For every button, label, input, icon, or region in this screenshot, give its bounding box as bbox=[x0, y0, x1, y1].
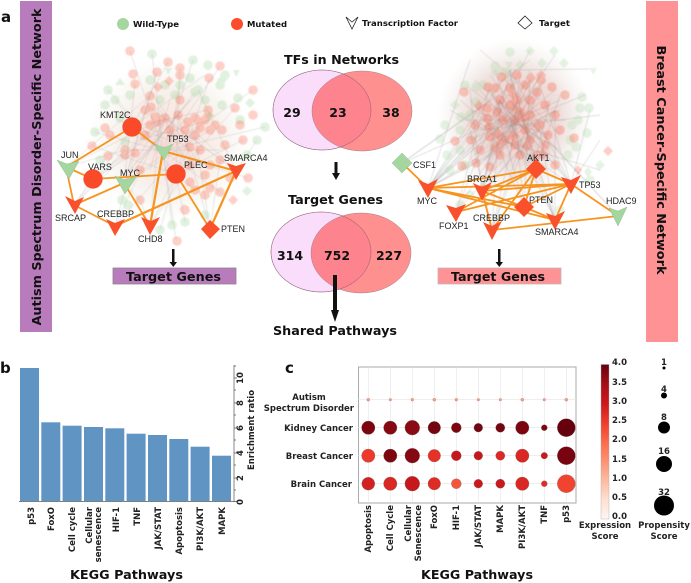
left network nodes bbox=[57, 118, 246, 239]
dot plot: Cell Cycle bbox=[386, 505, 396, 551]
right network labels: FOXP1 bbox=[439, 221, 469, 231]
left network labels: SRCAP bbox=[55, 213, 86, 223]
left network labels: VARS bbox=[88, 162, 112, 172]
right network edges bbox=[402, 163, 618, 230]
left side banner: Autism Spectrum Disorder-Specific Network bbox=[30, 7, 44, 326]
size legend: 32 bbox=[658, 488, 670, 498]
dot plot: Apoptosis bbox=[364, 505, 374, 553]
left network labels: CREBBP bbox=[97, 209, 134, 219]
x axis title b: KEGG Pathways bbox=[70, 567, 183, 582]
color bar legend: 0.5 bbox=[612, 493, 627, 503]
right network labels: MYC bbox=[417, 196, 438, 206]
left network labels: PLEC bbox=[184, 160, 208, 170]
right network background bbox=[402, 38, 618, 230]
arrow right network to target genes bbox=[496, 249, 503, 267]
bar chart: Enrichment ratio bbox=[247, 390, 257, 470]
legend: Mutated bbox=[247, 20, 287, 29]
target genes box left bbox=[113, 268, 236, 284]
heading TFs in Networks: TFs in Networks bbox=[284, 53, 399, 67]
panel label c: c bbox=[285, 359, 294, 377]
right side banner bbox=[646, 1, 678, 342]
bar chart: 0 bbox=[236, 499, 246, 505]
legend bbox=[117, 16, 570, 30]
dot plot: PI3K/AKT bbox=[518, 505, 528, 549]
arrow down to target genes bbox=[332, 162, 340, 180]
right network labels bbox=[413, 153, 637, 237]
color bar legend: 2.0 bbox=[612, 435, 627, 445]
bar chart: senescence bbox=[94, 507, 104, 562]
dot plot: Autism bbox=[292, 393, 326, 403]
color bar legend: 4.0 bbox=[612, 358, 627, 368]
color bar legend: 3.0 bbox=[612, 397, 627, 407]
left network edges bbox=[66, 127, 236, 229]
venn target genes bbox=[271, 212, 411, 293]
target genes box right: Target Genes bbox=[451, 270, 545, 284]
x axis title c: KEGG Pathways bbox=[421, 567, 533, 582]
right network labels: HDAC9 bbox=[606, 196, 637, 206]
arrow left network to target genes bbox=[170, 249, 177, 267]
right network labels: CREBBP bbox=[473, 213, 510, 223]
bar chart: 6 bbox=[236, 425, 246, 431]
bar chart: 2 bbox=[236, 475, 246, 481]
right network labels: BRCA1 bbox=[467, 174, 497, 184]
left network labels: JUN bbox=[61, 150, 78, 160]
heading Target Genes: Target Genes bbox=[288, 193, 383, 207]
left side banner bbox=[20, 1, 52, 332]
left network labels: PTEN bbox=[221, 224, 245, 234]
dot plot bbox=[264, 367, 576, 561]
bar chart: p53 bbox=[27, 507, 37, 525]
left network labels: MYC bbox=[120, 168, 140, 178]
bar chart: PI3K/AKT bbox=[196, 507, 206, 551]
bar chart: 10 bbox=[236, 372, 246, 384]
color bar legend: Score bbox=[592, 532, 619, 542]
size legend: 8 bbox=[661, 413, 667, 423]
dot plot: Senescence bbox=[414, 505, 424, 561]
dot plot: FoxO bbox=[430, 505, 440, 529]
right side banner: Breast Cancer-Specific Network bbox=[654, 46, 668, 276]
panel label a: a bbox=[1, 8, 11, 26]
left network labels: CHD8 bbox=[138, 234, 163, 244]
color bar legend: 1.0 bbox=[612, 474, 627, 484]
bar chart: 8 bbox=[236, 400, 246, 406]
venn TFs: 23 bbox=[329, 105, 347, 120]
dot plot: Spectrum Disorder bbox=[264, 404, 355, 414]
panel label b: b bbox=[0, 359, 11, 377]
arrow to shared pathways bbox=[331, 275, 339, 322]
legend: Target bbox=[539, 19, 570, 28]
left network labels: SMARCA4 bbox=[224, 153, 268, 163]
venn TFs: 38 bbox=[382, 105, 400, 120]
heading Shared Pathways: Shared Pathways bbox=[273, 324, 397, 338]
color bar legend: 3.5 bbox=[612, 378, 627, 388]
color bar legend bbox=[579, 358, 631, 542]
left network labels: TP53 bbox=[167, 134, 189, 144]
color bar legend: 2.5 bbox=[612, 416, 627, 426]
size legend: 16 bbox=[658, 447, 670, 457]
venn TFs bbox=[273, 70, 412, 151]
venn target genes: 314 bbox=[277, 248, 303, 263]
dot plot: MAPK bbox=[496, 505, 506, 533]
right network labels: CSF1 bbox=[413, 160, 436, 170]
target genes box right bbox=[438, 268, 561, 284]
dot plot: p53 bbox=[562, 505, 572, 523]
bar chart: Apoptosis bbox=[175, 507, 185, 555]
dot plot: Kidney Cancer bbox=[284, 424, 354, 434]
dot plot: Breast Cancer bbox=[286, 452, 354, 462]
size legend: 1 bbox=[661, 358, 667, 368]
bar chart bbox=[19, 365, 257, 562]
venn TFs: 29 bbox=[283, 105, 301, 120]
size legend: 4 bbox=[661, 385, 667, 395]
bar chart: Cell cycle bbox=[68, 507, 78, 552]
legend: Wild-Type bbox=[133, 20, 179, 29]
venn target genes: 227 bbox=[376, 248, 402, 263]
bar chart: TNF bbox=[133, 507, 143, 526]
dot plot: HIF-1 bbox=[452, 505, 462, 530]
bar chart: HIF-1 bbox=[112, 507, 122, 532]
right network nodes bbox=[392, 153, 627, 240]
venn target genes: 752 bbox=[324, 248, 350, 263]
dot plot: JAK/STAT bbox=[474, 505, 484, 548]
color bar legend: Expression bbox=[579, 521, 631, 531]
bar chart: 4 bbox=[236, 450, 246, 456]
dot plot: Cellular bbox=[404, 504, 414, 542]
size legend: Propensity bbox=[638, 521, 690, 531]
size legend: Score bbox=[651, 532, 678, 542]
bar chart: Cellular bbox=[85, 506, 95, 544]
dot plot: TNF bbox=[540, 505, 550, 524]
size legend bbox=[638, 358, 690, 542]
right network labels: PTEN bbox=[529, 195, 553, 205]
color bar legend: 0.0 bbox=[612, 512, 627, 522]
target genes box left: Target Genes bbox=[126, 270, 221, 284]
left network labels: KMT2C bbox=[100, 110, 131, 120]
bar chart: JAK/STAT bbox=[154, 507, 164, 550]
left network background bbox=[66, 46, 270, 246]
color bar legend: 1.5 bbox=[612, 455, 627, 465]
bar chart: MAPK bbox=[218, 507, 228, 535]
legend: Transcription Factor bbox=[362, 19, 458, 28]
right network labels: TP53 bbox=[579, 180, 601, 190]
bar chart: FoxO bbox=[47, 507, 57, 531]
right network labels: SMARCA4 bbox=[535, 227, 579, 237]
left network labels bbox=[55, 110, 268, 244]
right network labels: AKT1 bbox=[527, 153, 550, 163]
dot plot: Brain Cancer bbox=[291, 480, 353, 490]
